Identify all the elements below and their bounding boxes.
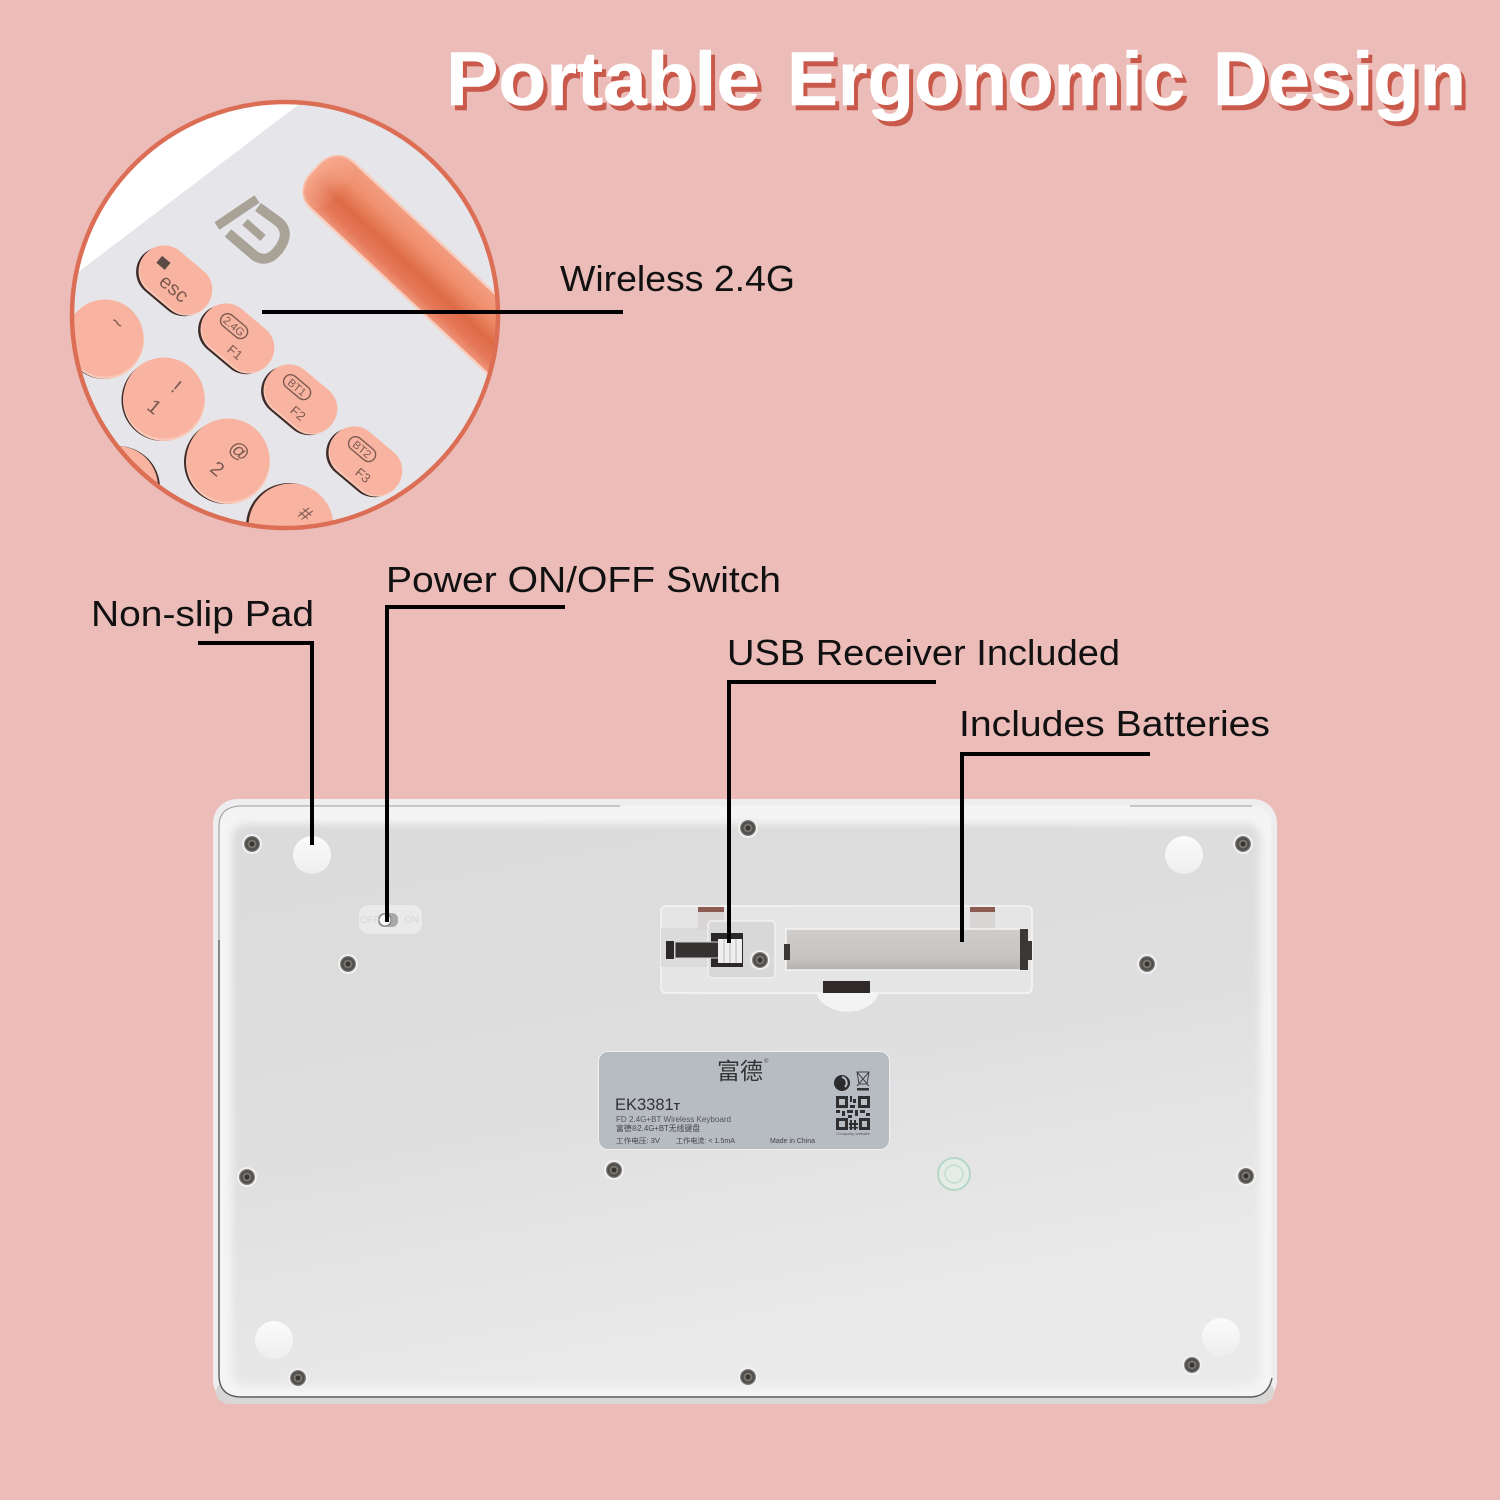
key: F2 BT1: BT1 — [285, 377, 308, 399]
product label: FD 2.4G+BT Wireless Keyboard — [616, 1115, 731, 1124]
icon: FD logo — [217, 199, 285, 259]
key: F1 2.4G — [198, 303, 274, 374]
power switch: OFF — [360, 915, 380, 926]
key: esc: esc — [155, 271, 193, 307]
orange handle slot — [302, 154, 496, 374]
callout: Non-slip Pad: Non-slip Pad — [91, 593, 314, 634]
callout: Wireless 2.4G: Wireless 2.4G — [560, 258, 795, 299]
product label: Made in China — [770, 1138, 815, 1145]
product label: Company website — [836, 1131, 871, 1136]
key: tilde: ~ — [105, 311, 128, 336]
product label: 工作电压: 3V — [616, 1136, 660, 1145]
key: F2 BT1 — [261, 364, 338, 436]
key: tilde — [74, 300, 144, 379]
key: F3 BT2 — [326, 426, 402, 498]
title: Ergonomic — [791, 42, 1189, 127]
key: 1: 1 — [143, 395, 165, 419]
title: Design — [1217, 42, 1470, 127]
feet — [255, 836, 1240, 1359]
white background corner — [79, 104, 298, 272]
title: Design — [1213, 37, 1466, 122]
callout: Non-slip Pad — [91, 593, 314, 845]
key: F3 BT2: BT2 — [350, 439, 373, 461]
product label: 富德 — [717, 1052, 763, 1086]
callout: Includes Batteries — [959, 703, 1270, 942]
USB receiver slot — [666, 921, 775, 978]
key: F2 BT1: F2 — [287, 403, 309, 424]
key: 1: ! — [167, 377, 185, 398]
screws — [237, 818, 1256, 1388]
title — [446, 37, 1470, 127]
battery bay — [784, 929, 1032, 970]
callout: Power ON/OFF Switch — [386, 559, 781, 922]
product label: 工作电流: < 1.5mA — [676, 1136, 735, 1145]
panel: keyboard close-up circle — [70, 100, 500, 530]
key: tab partial — [120, 446, 160, 485]
key: F1 2.4G: 2.4G — [220, 315, 246, 339]
battery compartment — [661, 906, 1032, 1012]
key: 3: # — [294, 502, 317, 527]
key: F1 2.4G: F1 — [224, 342, 246, 363]
title: Portable — [446, 37, 760, 122]
callout: Power ON/OFF Switch: Power ON/OFF Switch — [386, 559, 781, 600]
sticker — [938, 1158, 970, 1190]
key: F3 BT2: F3 — [352, 465, 374, 486]
QR code — [836, 1096, 870, 1130]
key: 2: @ — [224, 436, 254, 466]
power switch: ON — [404, 915, 419, 926]
key: 3 — [246, 483, 333, 526]
key: 2 — [184, 418, 270, 504]
callout: USB Receiver Included — [727, 632, 1120, 943]
key: 1 — [122, 358, 205, 441]
title: Ergonomic — [787, 37, 1185, 122]
key: 2: 2 — [206, 457, 228, 481]
product label — [598, 1051, 890, 1150]
product label: 富德®2.4G+BT无线键盘 — [616, 1123, 700, 1133]
callout: USB Receiver Included: USB Receiver Included — [727, 632, 1120, 673]
panel: keyboard underside — [213, 799, 1277, 1404]
power switch — [359, 905, 422, 934]
callout: Includes Batteries: Includes Batteries — [959, 703, 1270, 744]
product label: ® — [764, 1058, 769, 1065]
product label: EK3381T — [615, 1096, 680, 1114]
title: Portable — [450, 42, 764, 127]
key: esc — [136, 245, 212, 316]
